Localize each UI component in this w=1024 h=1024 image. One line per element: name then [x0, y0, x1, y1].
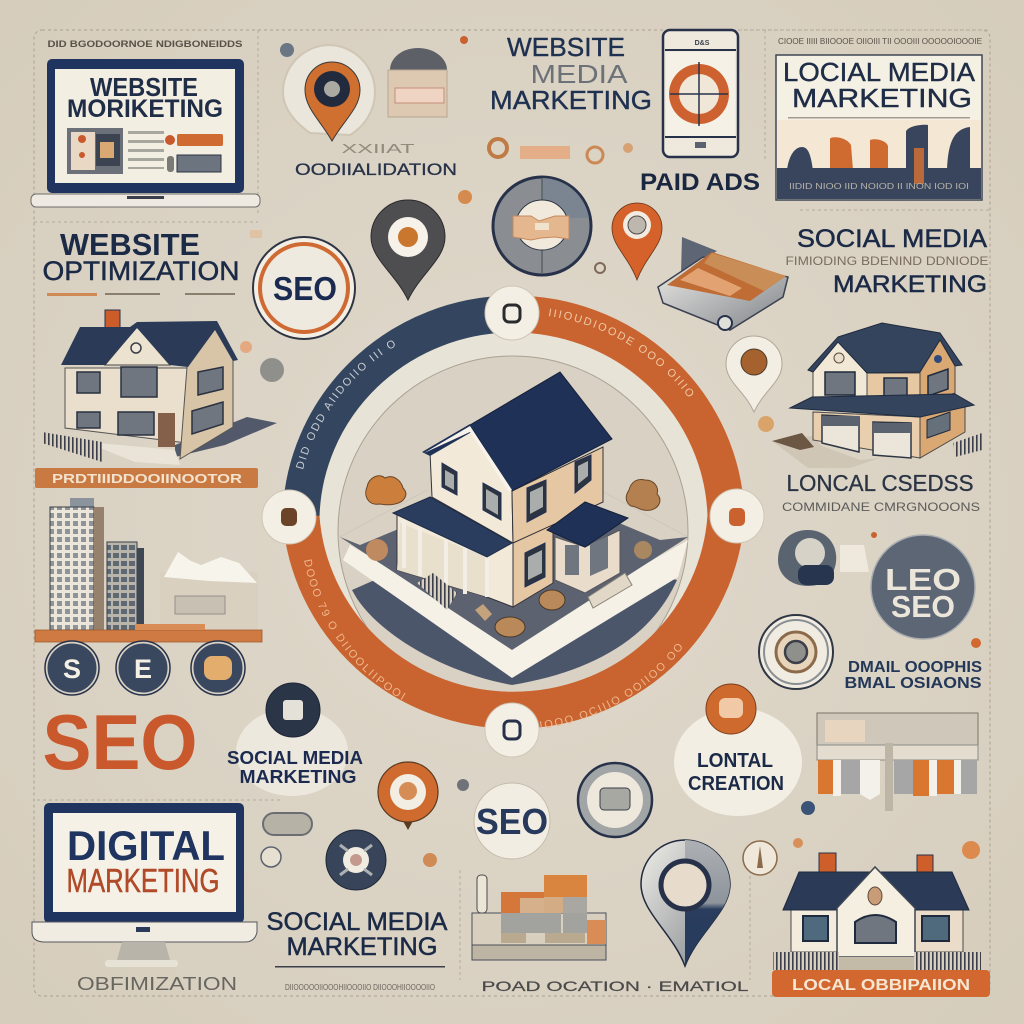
text: local leads right — [782, 470, 980, 514]
panel: local creation orange strip: LOCAL OBBIPAIION — [792, 977, 970, 994]
text: optimization bottom: OBFIMIZATION — [77, 974, 237, 994]
panel: local media marketing: MARKETING — [792, 83, 972, 113]
callout: local creation — [674, 684, 802, 816]
windows — [442, 455, 591, 587]
icon: seo circle: SEO — [273, 270, 337, 307]
ring label text: DOOO 79 O DIIOOLIIPOOI — [304, 559, 406, 700]
callout: local creation: CREATION — [688, 773, 784, 795]
text: local leads right: LONCAL CSEDSS — [786, 470, 974, 496]
text: road creation: POAD OCATION · EMATIOL — [482, 978, 749, 994]
upper right wall — [512, 447, 603, 543]
text: local leads right: COMMIDANE CMRGNOOONS — [782, 500, 980, 514]
icon: dark pin — [371, 200, 445, 300]
ground — [340, 490, 688, 650]
heading: social media marketing bottom: SOCIAL MEDIA — [266, 908, 448, 936]
icon: city buildings — [35, 498, 262, 642]
icon: seo round: SEO — [476, 801, 548, 842]
heading: website media marketing — [490, 32, 652, 115]
ring node: top — [485, 286, 539, 340]
text: orange dashes under optimization — [47, 293, 235, 296]
heading: digital marketing: MARKETING — [66, 862, 220, 899]
panel: website marketing laptop — [31, 59, 260, 207]
icon: leo seo circle: SEO — [891, 589, 955, 624]
text: top left tiny caption: DID BGODOORNOE NDIGBONEIDDS — [48, 39, 242, 50]
ring label text: IIIOUDIOODE OOO OIIIO — [549, 308, 694, 396]
icon: seo round — [474, 783, 550, 859]
icon: small compass badge — [743, 841, 777, 875]
text: email campaigns: DMAIL OOOPHIS — [848, 659, 982, 676]
text: caption under social media: DIIOOOOOIIOOOHIIOOOIIO DIIOOOHIIOOOOIIO — [285, 983, 435, 992]
icon: large pin — [641, 840, 730, 966]
icon: location pin top — [283, 45, 447, 141]
icon: open book device — [658, 237, 788, 330]
icon: grey badge — [578, 763, 652, 837]
heading: website optimization — [42, 227, 240, 286]
icon: seo circle — [253, 237, 355, 339]
stones — [495, 617, 525, 637]
icon: building chart — [472, 875, 606, 960]
heading: website marketing: MORIKETING — [67, 95, 223, 123]
lower right wall — [513, 523, 553, 607]
panel: local creation orange strip — [772, 970, 990, 997]
ring arc: navy — [301, 314, 512, 517]
icon: box beside pin — [388, 48, 447, 117]
ring arc: orange top right — [512, 314, 726, 516]
text: orange label strip: PRDTIIIDDOOIINOOTOR — [52, 471, 243, 486]
icon: house right — [772, 323, 982, 468]
icon: social bubble — [227, 683, 363, 796]
lower left wall — [397, 497, 513, 607]
icon: social bubble: SOCIAL MEDIA — [227, 748, 363, 768]
center isometric house — [340, 372, 688, 685]
heading: website media marketing: WEBSITE — [507, 32, 625, 62]
panel: local media marketing: IIDID NIOO IID NOIOD II INON IOD IOI — [789, 182, 969, 191]
heading: social media marketing bottom: MARKETING — [286, 933, 438, 961]
upper left wall — [430, 428, 513, 543]
ring node: right — [710, 489, 764, 543]
heading: website media marketing: MARKETING — [490, 85, 652, 115]
text: email campaigns: BMAL OSIAONS — [844, 675, 982, 692]
ring label text: DID ODD AIIDOIIO III O — [296, 340, 395, 470]
icon: phone — [663, 30, 738, 157]
heading: social media marketing bottom — [266, 908, 448, 961]
ring label text: IOOO OCIIIO OOIIOO OO — [540, 644, 682, 729]
heading: digital marketing — [66, 822, 225, 899]
text: paid ads: PAID ADS — [640, 169, 760, 196]
text: optimization label: XXIIAT — [342, 141, 415, 156]
panel: local media marketing — [776, 55, 982, 200]
icon: light pin — [726, 336, 782, 412]
ring arc: orange bottom — [301, 516, 726, 710]
text: optimization label — [295, 141, 457, 179]
trees — [366, 476, 406, 505]
icon: leo seo circle: LEO — [885, 562, 961, 597]
heading: seo large: SEO — [42, 698, 198, 786]
text: orange label strip — [35, 468, 258, 488]
heading: website marketing — [67, 72, 223, 123]
main roof — [470, 372, 612, 491]
icon: social media small badge — [326, 830, 386, 890]
text: email campaigns — [844, 659, 982, 692]
icon: orange badge — [378, 762, 438, 830]
icon: S E and badge row: S — [63, 654, 81, 684]
icon: leo seo circle — [871, 535, 975, 639]
heading: website optimization: WEBSITE — [60, 227, 200, 262]
icon: small gray chips — [261, 813, 312, 867]
ring label text — [296, 308, 694, 729]
ring node: left — [262, 490, 316, 544]
sidewalk — [343, 540, 688, 678]
icon: concentric badge — [759, 615, 833, 689]
icon: storefront columns — [817, 713, 978, 811]
heading: website optimization: OPTIMIZATION — [42, 256, 240, 286]
icon: round badge — [493, 177, 591, 275]
icon: house left — [42, 310, 277, 465]
small decorative marks — [240, 36, 981, 867]
porches — [397, 523, 487, 597]
text: caption over local panel: CIOOE IIIII BIIOOOE OIIOIII TII OOOIII OOOOOIOOOIE — [778, 37, 982, 46]
panel: digital marketing monitor — [32, 803, 257, 967]
icon: house bottom right — [773, 853, 981, 970]
icon: social bubble: MARKETING — [240, 767, 356, 787]
icon: headset — [778, 530, 869, 586]
icon: S E and badge row — [45, 641, 245, 695]
panel: local media marketing: LOCIAL MEDIA — [783, 57, 976, 87]
callout: local creation: LONTAL — [697, 750, 773, 772]
heading: social media marketing right: MARKETING — [833, 271, 987, 298]
heading: digital marketing: DIGITAL — [67, 822, 225, 869]
icon: orange pin — [612, 203, 662, 280]
heading: website media marketing: MEDIA — [530, 59, 628, 89]
text: optimization label: OODIIALIDATION — [295, 160, 457, 179]
icon: S E and badge row: E — [134, 654, 152, 684]
center ring — [262, 286, 764, 758]
ring node: bottom — [485, 703, 539, 757]
heading: social media marketing right: SOCIAL MEDIA — [797, 225, 987, 253]
platform hull — [352, 560, 677, 685]
heading: social media marketing right — [786, 225, 988, 298]
heading: social media marketing right: FIMIODING BDENIND DDNIODE — [786, 254, 988, 268]
icon: phone: D&S — [695, 40, 710, 47]
heading: website marketing: WEBSITE — [90, 72, 198, 102]
